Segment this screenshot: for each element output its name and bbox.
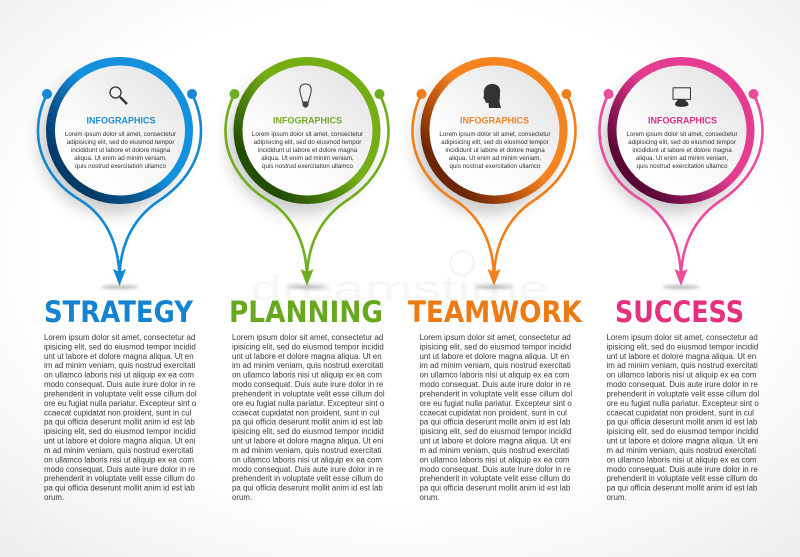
body text: orum. xyxy=(420,493,440,502)
body text: modo consequat. Duis aute irure dolor in re xyxy=(606,465,758,474)
body text: unt ut labore et dolore magna aliqua. Ut en xyxy=(420,352,569,361)
body text: modo consequat. Duis aute irure dolor in re xyxy=(44,465,196,474)
body text: ipisicing elit, sed do eiusmod tempor incidid xyxy=(420,342,571,351)
body text: ipisicing elit, sed do eiusmod tempor incidid xyxy=(606,427,758,436)
panel: strategy xyxy=(38,57,201,502)
arrow ground shadow xyxy=(475,285,513,289)
body text: on ullamco laboris nisi ut aliquip ex ea com xyxy=(44,455,194,464)
body text: prehenderit in voluptate velit esse cillum dol xyxy=(232,390,385,398)
watermark xyxy=(250,251,550,308)
body text: modo consequat. Duis aute irure dolor in re xyxy=(420,380,571,389)
body text: m ad minim veniam, quis nostrud exercitati xyxy=(44,446,194,455)
disc text: incididunt ut labore et dolore magna xyxy=(445,147,545,154)
watermark: dreamstime xyxy=(250,270,550,308)
heading: SUCCESS xyxy=(615,295,744,329)
body text: modo consequat. Duis aute irure dolor in re xyxy=(232,465,384,474)
disc text: incididunt ut labore et dolore magna xyxy=(71,147,171,154)
body text: ccaecat cupidatat non proident, sunt in cul xyxy=(232,408,380,417)
body text xyxy=(44,333,197,502)
body text: ipisicing elit, sed do eiusmod tempor incidid xyxy=(232,427,384,436)
body text: m ad minim veniam, quis nostrud exercitati xyxy=(606,446,756,455)
body text: ipisicing elit, sed do eiusmod tempor incidid xyxy=(232,342,384,351)
body text: Lorem ipsum dolor sit amet, consectetur ad xyxy=(232,333,383,342)
disc text: aliqua. Ut enim ad minim veniam, xyxy=(449,155,541,162)
ring shadow xyxy=(602,70,746,214)
body text: on ullamco laboris nisi ut aliquip ex ea com xyxy=(606,371,757,380)
body text: prehenderit in voluptate velit esse cillum do xyxy=(44,474,195,483)
ring shadow xyxy=(415,70,559,214)
arrow ground shadow xyxy=(100,285,138,289)
body text xyxy=(232,333,385,502)
body text: ipisicing elit, sed do eiusmod tempor incidid xyxy=(44,342,196,351)
disc heading: INFOGRAPHICS xyxy=(273,116,343,126)
disc xyxy=(430,66,560,196)
body text: unt ut labore et dolore magna aliqua. Ut eni xyxy=(232,436,384,446)
body text xyxy=(420,333,572,502)
body text: unt ut labore et dolore magna aliqua. Ut eni xyxy=(606,436,758,446)
heading: PLANNING xyxy=(229,295,383,329)
disc text: incididunt ut labore et dolore magna xyxy=(632,147,732,154)
body text: on ullamco laboris nisi ut aliquip ex ea com xyxy=(606,455,757,464)
disc text: quis nostrud exercitation ullamco xyxy=(75,163,167,170)
body text xyxy=(606,333,759,502)
disc text: Lorem ipsum dolor sit amet, consectetur xyxy=(439,131,551,138)
disc heading: INFOGRAPHICS xyxy=(460,116,530,126)
panel: success xyxy=(600,57,762,502)
ring shadow xyxy=(228,70,372,214)
body text: on ullamco laboris nisi ut aliquip ex ea com xyxy=(232,455,382,464)
body text: ore eu fugiat nulla pariatur. Excepteur sint o xyxy=(44,399,197,408)
body text: pa qui officia deserunt mollit anim id est lab xyxy=(420,418,571,427)
side curves with dots and arrow xyxy=(600,89,762,286)
body text: ore eu fugiat nulla pariatur. Excepteur sint o xyxy=(232,399,385,408)
body text: im ad minim veniam, quis nostrud exercitati xyxy=(606,361,758,370)
body text: prehenderit in voluptate velit esse cillum dol xyxy=(420,390,572,398)
disc text: adipisicing elit, sed do eiusmod tempor xyxy=(254,139,361,146)
body text: prehenderit in voluptate velit esse cillum do xyxy=(232,474,383,483)
body text: pa qui officia deserunt mollit anim id est lab xyxy=(44,484,195,493)
icon: magnifier xyxy=(110,87,127,104)
body text: prehenderit in voluptate velit esse cillum dol xyxy=(606,390,759,398)
body text: pa qui officia deserunt mollit anim id est lab xyxy=(420,484,571,493)
icon: monitor xyxy=(673,88,690,107)
disc xyxy=(55,66,185,196)
disc text: incididunt ut labore et dolore magna xyxy=(258,147,358,154)
ring xyxy=(46,57,193,204)
side curves with dots and arrow xyxy=(412,89,576,286)
body text: im ad minim veniam, quis nostrud exercitati xyxy=(44,361,196,370)
body text: pa qui officia deserunt mollit anim id est lab xyxy=(44,418,195,427)
body text: Lorem ipsum dolor sit amet, consectetur ad xyxy=(420,333,571,342)
heading: TEAMWORK xyxy=(408,295,583,329)
body text: pa qui officia deserunt mollit anim id est lab xyxy=(232,484,383,493)
disc text: quis nostrud exercitation ullamco xyxy=(262,163,354,170)
disc text: quis nostrud exercitation ullamco xyxy=(636,163,728,170)
panel: planning xyxy=(226,57,388,502)
heading: STRATEGY xyxy=(44,295,194,329)
ring xyxy=(608,57,754,204)
disc text: aliqua. Ut enim ad minim veniam, xyxy=(636,155,728,162)
icon: light bulb xyxy=(300,84,311,108)
body text: ore eu fugiat nulla pariatur. Excepteur sint o xyxy=(606,399,759,408)
disc text: adipisicing elit, sed do eiusmod tempor xyxy=(441,139,549,146)
disc text: Lorem ipsum dolor sit amet, consectetur xyxy=(252,131,363,138)
body text: pa qui officia deserunt mollit anim id est lab xyxy=(606,484,758,493)
body text: orum. xyxy=(232,493,252,502)
body text: m ad minim veniam, quis nostrud exercitati xyxy=(232,446,382,455)
body text: modo consequat. Duis aute irure dolor in re xyxy=(232,380,384,389)
body text: Lorem ipsum dolor sit amet, consectetur ad xyxy=(606,333,758,342)
body text: on ullamco laboris nisi ut aliquip ex ea com xyxy=(420,371,570,380)
body text: Lorem ipsum dolor sit amet, consectetur ad xyxy=(44,333,195,342)
body text: modo consequat. Duis aute irure dolor in re xyxy=(44,380,196,389)
body text: on ullamco laboris nisi ut aliquip ex ea com xyxy=(420,455,570,464)
body text: im ad minim veniam, quis nostrud exercitati xyxy=(232,361,384,370)
disc text: quis nostrud exercitation ullamco xyxy=(449,163,541,170)
body text: ore eu fugiat nulla pariatur. Excepteur sint o xyxy=(420,399,572,408)
body text: on ullamco laboris nisi ut aliquip ex ea com xyxy=(232,371,382,380)
body text: unt ut labore et dolore magna aliqua. Ut eni xyxy=(44,436,196,446)
ring xyxy=(420,57,568,204)
disc text: adipisicing elit, sed do eiusmod tempor xyxy=(628,139,736,146)
body text: prehenderit in voluptate velit esse cillum do xyxy=(420,474,571,483)
body text: orum. xyxy=(44,493,64,502)
disc text xyxy=(252,131,363,170)
disc text: Lorem ipsum dolor sit amet, consectetur xyxy=(626,131,738,138)
panel: teamwork xyxy=(408,57,583,502)
body text: unt ut labore et dolore magna aliqua. Ut en xyxy=(232,352,382,361)
disc text: Lorem ipsum dolor sit amet, consectetur xyxy=(65,131,176,138)
arrow ground shadow xyxy=(288,285,326,289)
body text: prehenderit in voluptate velit esse cillum dol xyxy=(44,390,197,398)
disc heading: INFOGRAPHICS xyxy=(86,116,156,126)
body text: im ad minim veniam, quis nostrud exercitati xyxy=(420,361,571,370)
body text: ipisicing elit, sed do eiusmod tempor incidid xyxy=(44,427,196,436)
disc text xyxy=(65,131,176,170)
body text: ipisicing elit, sed do eiusmod tempor incidid xyxy=(606,342,758,351)
disc text: aliqua. Ut enim ad minim veniam, xyxy=(261,155,354,162)
ring xyxy=(234,57,380,204)
body text: pa qui officia deserunt mollit anim id est lab xyxy=(606,418,758,427)
disc text xyxy=(626,131,738,170)
disc text: adipisicing elit, sed do eiusmod tempor xyxy=(67,139,174,146)
body text: unt ut labore et dolore magna aliqua. Ut en xyxy=(606,352,756,361)
body text: m ad minim veniam, quis nostrud exercitati xyxy=(420,446,569,455)
arrow ground shadow xyxy=(662,285,700,289)
body text: ipisicing elit, sed do eiusmod tempor incidid xyxy=(420,427,571,436)
side curves with dots and arrow xyxy=(38,89,201,286)
body text: ccaecat cupidatat non proident, sunt in cul xyxy=(606,408,754,417)
disc text: aliqua. Ut enim ad minim veniam, xyxy=(74,155,167,162)
body text: ccaecat cupidatat non proident, sunt in cul xyxy=(44,408,192,417)
side curves with dots and arrow xyxy=(226,89,388,286)
body text: unt ut labore et dolore magna aliqua. Ut en xyxy=(44,352,194,361)
body text: pa qui officia deserunt mollit anim id est lab xyxy=(232,418,383,427)
body text: ccaecat cupidatat non proident, sunt in cul xyxy=(420,408,567,417)
body text: orum. xyxy=(606,493,627,502)
body text: modo consequat. Duis aute irure dolor in re xyxy=(606,380,758,389)
body text: unt ut labore et dolore magna aliqua. Ut eni xyxy=(420,436,571,446)
ring shadow xyxy=(40,70,184,214)
disc heading: INFOGRAPHICS xyxy=(648,116,718,126)
disc text xyxy=(439,131,551,170)
body text: prehenderit in voluptate velit esse cillum do xyxy=(606,474,758,483)
disc xyxy=(242,66,372,196)
disc xyxy=(616,66,746,196)
body text: on ullamco laboris nisi ut aliquip ex ea com xyxy=(44,371,194,380)
body text: modo consequat. Duis aute irure dolor in re xyxy=(420,465,571,474)
icon: head silhouette xyxy=(484,84,501,108)
